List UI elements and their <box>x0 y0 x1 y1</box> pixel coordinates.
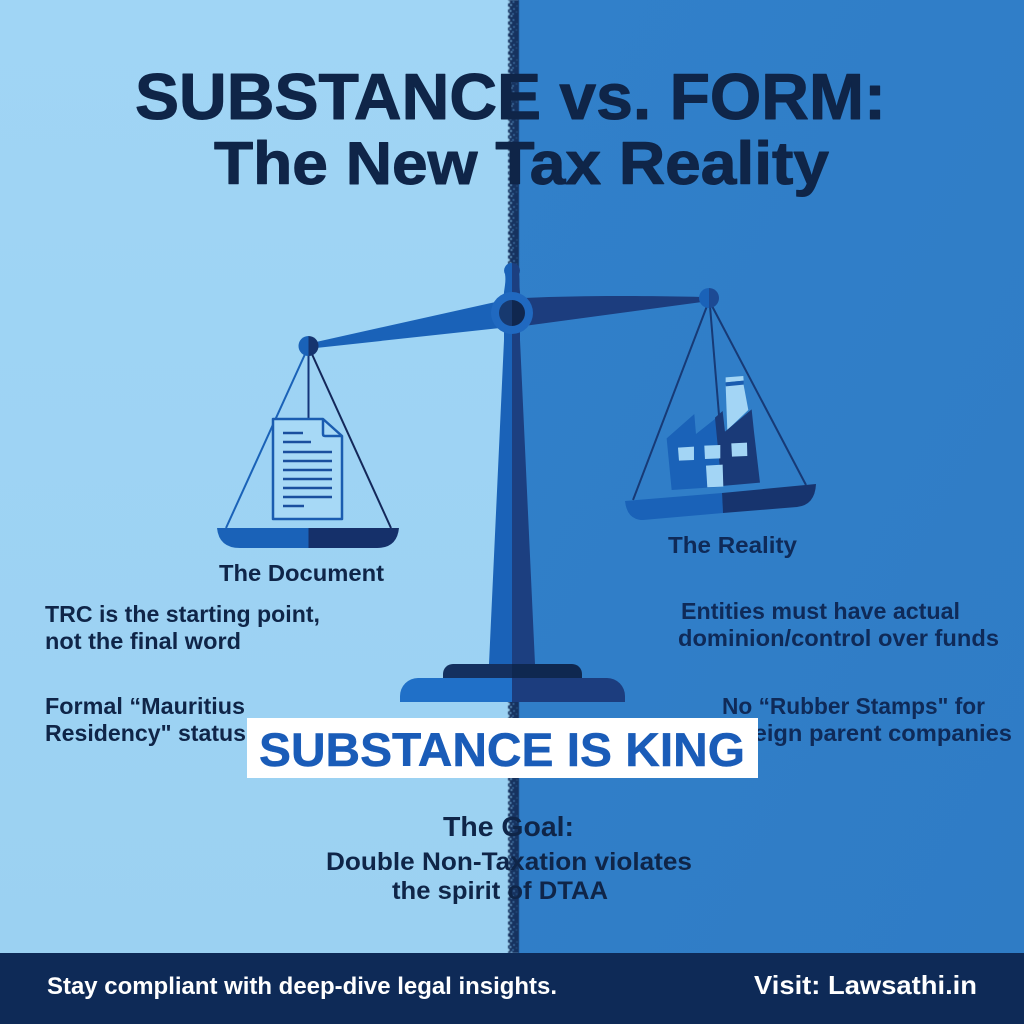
beam right arm <box>524 296 702 326</box>
label: The Document: The Document <box>219 560 384 586</box>
text block: actual control <box>678 598 999 651</box>
callout: substance is king: SUBSTANCE IS KING <box>259 723 745 776</box>
title <box>135 60 886 197</box>
right pan assembly <box>625 288 816 520</box>
text block: actual control: Entities must have actual <box>681 598 960 624</box>
left strings <box>226 352 391 528</box>
text block: Mauritius residency: Formal “Mauritius <box>45 693 245 719</box>
icon: factory <box>667 376 760 490</box>
left pan assembly <box>217 336 399 548</box>
right strings <box>633 306 806 500</box>
text block: the goal <box>326 811 692 905</box>
pivot <box>491 292 533 334</box>
right knob <box>699 288 719 308</box>
title: SUBSTANCE vs. FORM: <box>135 60 886 133</box>
text block: TRC point: not the final word <box>45 628 241 654</box>
footer message: Stay compliant with deep-dive legal insights. <box>47 973 557 1000</box>
text block: the goal: the spirit of DTAA <box>392 877 608 905</box>
footer link: Visit: Lawsathi.in <box>754 970 977 1000</box>
text block: Mauritius residency <box>45 693 246 746</box>
balance scale <box>217 263 816 702</box>
text block: the goal: Double Non-Taxation violates <box>326 848 692 876</box>
icon: document <box>273 419 342 519</box>
text block: the goal: The Goal: <box>443 811 574 842</box>
title: The New Tax Reality <box>214 130 830 197</box>
scale column <box>489 263 535 664</box>
text block: TRC point <box>45 601 320 654</box>
jagged centre divider <box>508 0 519 953</box>
text block: rubber stamps <box>722 693 1012 746</box>
left knob <box>298 336 318 356</box>
footer bar <box>0 953 1024 1024</box>
beam left arm <box>316 301 500 348</box>
panel: left light background <box>0 0 518 953</box>
text block: TRC point: TRC is the starting point, <box>45 601 320 627</box>
left pan <box>217 528 399 548</box>
scale base <box>400 664 625 702</box>
text block: rubber stamps: foreign parent companies <box>722 720 1012 746</box>
label: The Reality: The Reality <box>668 532 797 558</box>
right pan <box>625 484 816 520</box>
text block: actual control: dominion/control over funds <box>678 625 999 651</box>
panel: right dark background <box>518 0 1024 953</box>
text block: Mauritius residency: Residency" status <box>45 720 246 746</box>
text block: rubber stamps: No “Rubber Stamps" for <box>722 693 985 719</box>
